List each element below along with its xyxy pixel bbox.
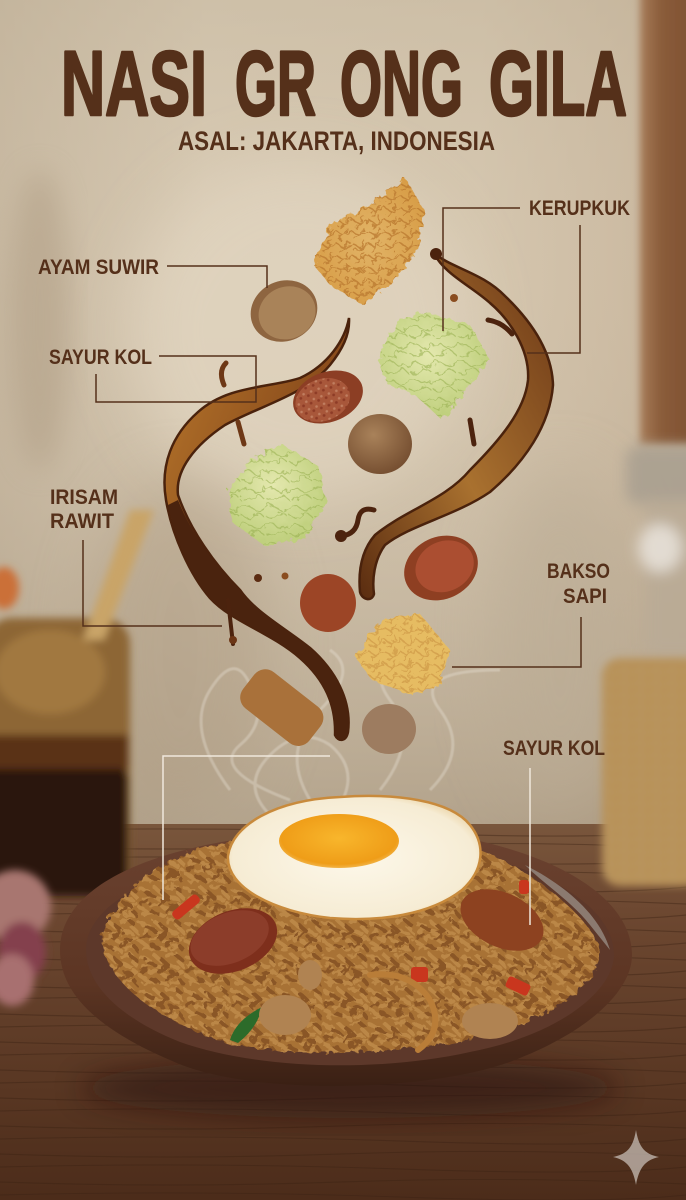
wooden post — [640, 0, 686, 445]
floating meatball small — [362, 704, 416, 754]
label: bakso sapi: SAPI — [563, 585, 607, 608]
subtitle: ASAL: JAKARTA, INDONESIA — [178, 126, 495, 156]
label: bakso sapi: BAKSO — [547, 560, 610, 583]
label: irisam rawit: RAWIT — [50, 510, 114, 533]
label: sayur kol top — [49, 346, 256, 402]
icon: sparkle watermark — [613, 1130, 659, 1185]
floating sausage right — [393, 524, 489, 612]
plate of fried rice — [60, 796, 632, 1086]
title — [61, 33, 627, 135]
shallots — [0, 870, 51, 1006]
sauce splash, right — [335, 248, 553, 599]
label: sayur kol bottom: SAYUR KOL — [503, 737, 605, 760]
floating cabbage lower — [228, 444, 327, 546]
title: NASI — [61, 33, 207, 135]
label: irisam rawit — [50, 486, 222, 626]
background sauce jar, left — [0, 510, 154, 896]
background glass jar, right — [626, 445, 686, 655]
sausage left on rice — [179, 896, 287, 986]
label: sayur kol top: SAYUR KOL — [49, 346, 152, 369]
label: kerupkuk — [443, 197, 630, 353]
label: ayam suwir: AYAM SUWIR — [38, 256, 159, 279]
floating noodle crisp — [314, 178, 424, 304]
label: irisam rawit: IRISAM — [50, 486, 118, 509]
noodle strand — [370, 974, 435, 1050]
label: bakso sapi — [452, 560, 610, 667]
plate — [60, 832, 632, 1086]
floating sausage centre — [300, 574, 356, 632]
title: GR — [235, 33, 316, 135]
yolk — [279, 814, 399, 868]
sauce splash, left — [164, 318, 349, 740]
label: kerupkuk: KERUPKUK — [529, 197, 630, 220]
steam — [201, 650, 500, 815]
floating egg crisp — [354, 614, 450, 695]
plate shadow — [80, 1058, 620, 1118]
wooden table — [0, 824, 686, 1200]
chili pieces — [171, 880, 531, 997]
floating meat ball slice — [241, 269, 327, 353]
green onion — [230, 1007, 262, 1043]
background jar of crackers, right — [602, 658, 686, 886]
floating sausage cylinder — [235, 664, 329, 752]
floating cabbage — [378, 312, 490, 420]
fried egg — [228, 796, 480, 919]
plate inner rim — [86, 846, 614, 1065]
sausage right on rice — [451, 877, 553, 963]
label: ayam suwir — [38, 256, 267, 288]
chicken pieces — [259, 960, 518, 1039]
rice mound — [101, 842, 600, 1052]
plate light reflection — [525, 865, 610, 950]
floating sausage slice — [286, 361, 370, 433]
title: ONG — [340, 33, 463, 135]
background wall — [0, 0, 686, 830]
leader line: plate left — [163, 756, 330, 900]
floating meatball — [348, 414, 412, 474]
